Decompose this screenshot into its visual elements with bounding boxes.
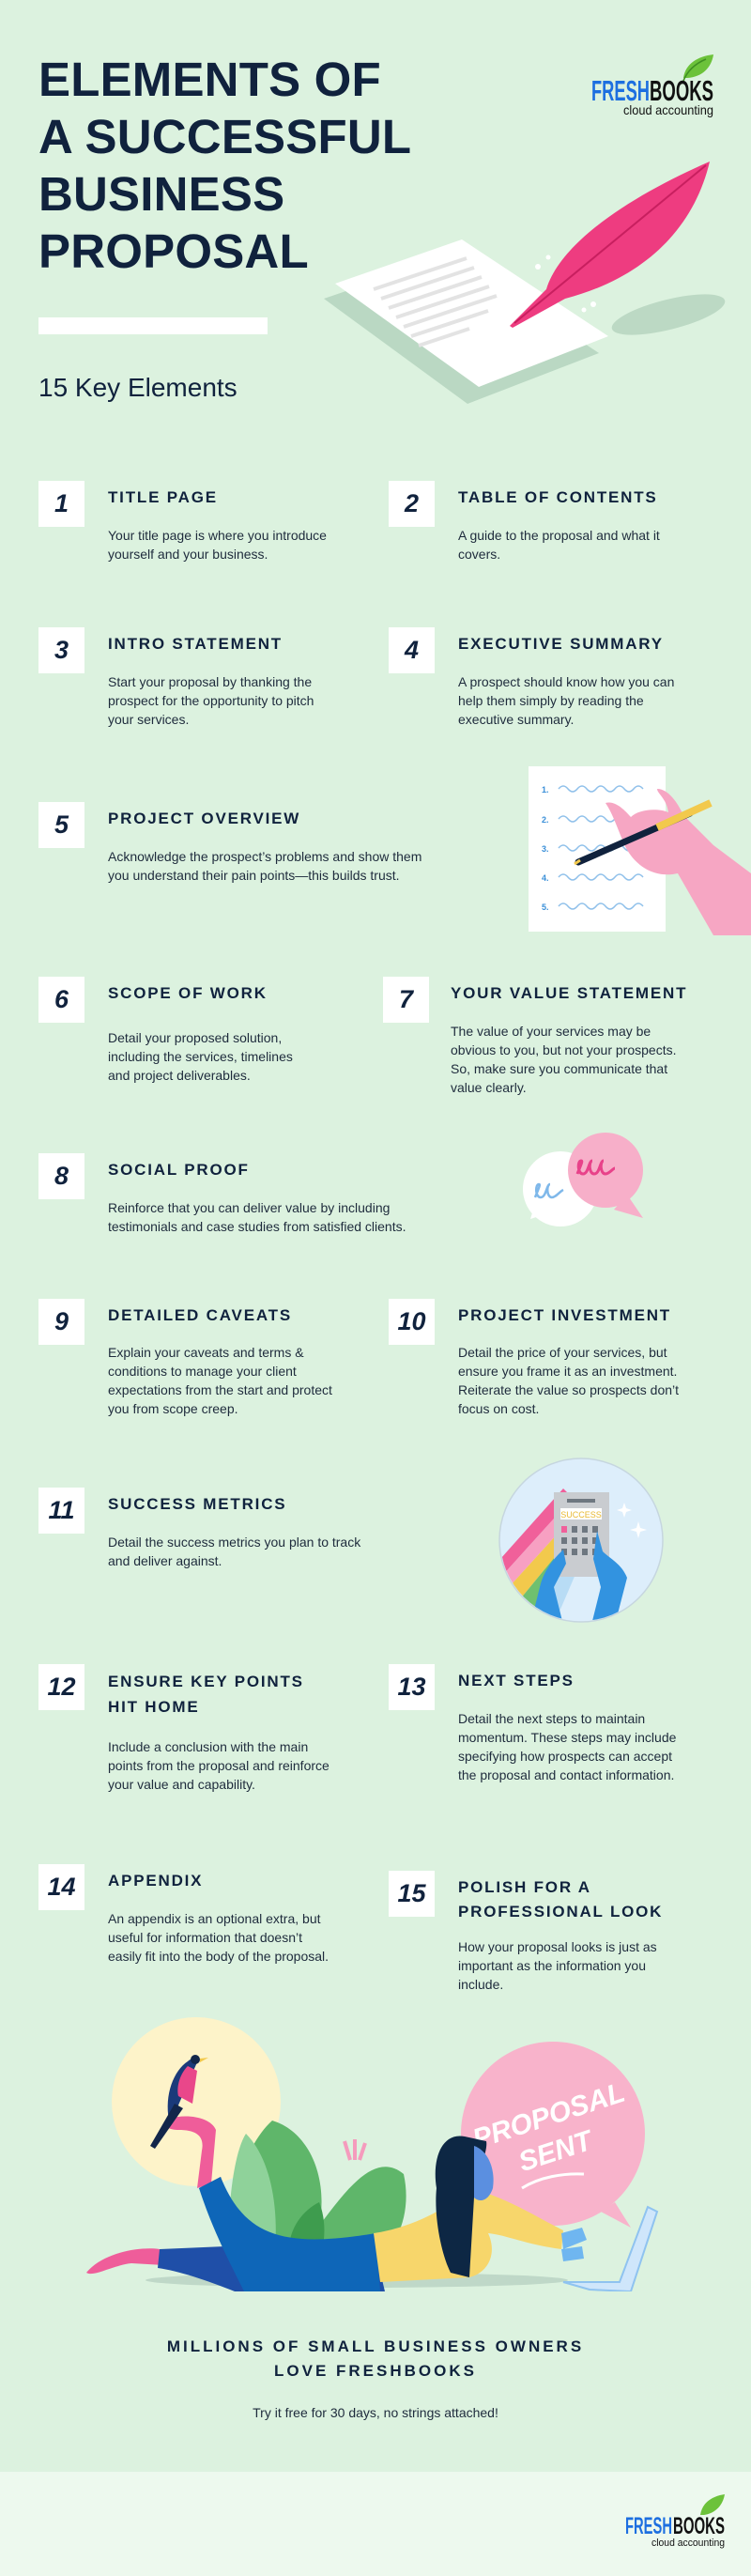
body 7: So, make sure you communicate that xyxy=(451,1061,667,1076)
body 9: Explain your caveats and terms & xyxy=(108,1345,304,1360)
body 3: Start your proposal by thanking the xyxy=(108,674,312,689)
title: A SUCCESSFUL xyxy=(38,110,411,163)
body 14: An appendix is an optional extra, but xyxy=(108,1911,321,1926)
number 4 xyxy=(389,627,435,673)
illustration: calculator circle: SUCCESS xyxy=(560,1510,602,1519)
body 4: executive summary. xyxy=(458,712,574,727)
item 15 xyxy=(389,1871,663,1992)
number 2: 2 xyxy=(405,489,419,517)
heading 9: DETAILED CAVEATS xyxy=(108,1306,292,1324)
number 4: 4 xyxy=(405,636,419,664)
body 10: Detail the price of your services, but xyxy=(458,1345,667,1360)
heading 5: PROJECT OVERVIEW xyxy=(108,810,300,827)
illustration: checklist with hand and pen: 2. xyxy=(542,815,549,825)
number 14 xyxy=(38,1864,84,1910)
logo: freshbooks footer: cloud accounting xyxy=(651,2537,725,2549)
number 11: 11 xyxy=(48,1496,75,1524)
heading 15: PROFESSIONAL LOOK xyxy=(458,1903,663,1920)
illustration: checklist with hand and pen: 1. xyxy=(542,785,549,794)
body 10: focus on cost. xyxy=(458,1401,539,1416)
body 6: and project deliverables. xyxy=(108,1068,251,1083)
number 11 xyxy=(38,1488,84,1534)
body 7: value clearly. xyxy=(451,1080,527,1095)
body 3: your services. xyxy=(108,712,189,727)
heading 14: APPENDIX xyxy=(108,1872,203,1890)
body 7 xyxy=(451,1024,676,1095)
body 10: ensure you frame it as an investment. xyxy=(458,1364,677,1379)
number 13 xyxy=(389,1664,435,1710)
item 4 xyxy=(389,627,674,727)
body 9 xyxy=(108,1345,332,1416)
body 12: your value and capability. xyxy=(108,1777,255,1792)
footer headline xyxy=(167,2337,584,2380)
item 10 xyxy=(389,1299,679,1416)
number 7 xyxy=(383,977,429,1023)
heading 15 xyxy=(458,1878,663,1920)
illustration: woman sending proposal: SENT xyxy=(514,2124,598,2178)
footer band xyxy=(0,2472,751,2576)
body 2: A guide to the proposal and what it xyxy=(458,528,660,543)
body 13: specifying how prospects can accept xyxy=(458,1749,672,1764)
body 1: yourself and your business. xyxy=(108,547,268,562)
illustration: paper and feather xyxy=(324,162,725,404)
item 5 xyxy=(38,802,421,883)
number 8 xyxy=(38,1153,84,1199)
number 14: 14 xyxy=(47,1873,76,1901)
illustration: checklist with hand and pen xyxy=(529,766,751,935)
body 15: include. xyxy=(458,1977,503,1992)
item 8 xyxy=(38,1153,406,1234)
number 15 xyxy=(389,1871,435,1917)
body 7: The value of your services may be xyxy=(451,1024,651,1039)
heading 6: SCOPE OF WORK xyxy=(108,984,268,1002)
heading 10: PROJECT INVESTMENT xyxy=(458,1306,671,1324)
white title bar xyxy=(38,317,268,334)
number 3 xyxy=(38,627,84,673)
logo: freshbooks header xyxy=(591,54,713,117)
body 5: you understand their pain points—this builds trust. xyxy=(108,868,400,883)
item 6 xyxy=(38,977,293,1083)
number 5 xyxy=(38,802,84,848)
item 7 xyxy=(383,977,687,1095)
body 15: important as the information you xyxy=(458,1958,646,1973)
heading 3: INTRO STATEMENT xyxy=(108,635,283,653)
illustration: calculator circle xyxy=(498,1458,664,1623)
number 7: 7 xyxy=(399,985,413,1013)
item 14 xyxy=(38,1864,329,1964)
body 10: Reiterate the value so prospects don’t xyxy=(458,1382,679,1397)
body 11: and deliver against. xyxy=(108,1553,222,1568)
body 5: Acknowledge the prospect’s problems and show them xyxy=(108,849,421,864)
body 2: covers. xyxy=(458,547,500,562)
illustration: woman sending proposal xyxy=(86,2017,659,2291)
logo: freshbooks footer xyxy=(625,2494,725,2549)
body 4 xyxy=(458,674,674,727)
body 13 xyxy=(458,1711,676,1782)
heading 11: SUCCESS METRICS xyxy=(108,1495,286,1513)
body 14: easily fit into the body of the proposal. xyxy=(108,1949,329,1964)
illustration: woman sending proposal: PROPOSAL xyxy=(468,2077,629,2155)
heading 8: SOCIAL PROOF xyxy=(108,1161,250,1179)
number 15: 15 xyxy=(397,1879,426,1907)
body 3 xyxy=(108,674,314,727)
number 12 xyxy=(38,1664,84,1710)
body 5 xyxy=(108,849,421,883)
body 1: Your title page is where you introduce xyxy=(108,528,327,543)
illustration: checklist with hand and pen: 3. xyxy=(542,844,549,854)
title: BUSINESS xyxy=(38,167,284,221)
body 15 xyxy=(458,1939,657,1992)
number 1: 1 xyxy=(54,489,69,517)
body 4: A prospect should know how you can xyxy=(458,674,674,689)
title: PROPOSAL xyxy=(38,224,309,278)
number 13: 13 xyxy=(397,1673,426,1701)
number 1 xyxy=(38,481,84,527)
illustration: speech bubbles xyxy=(523,1133,643,1226)
subtitle: 15 Key Elements xyxy=(38,373,238,402)
body 13: the proposal and contact information. xyxy=(458,1767,674,1782)
number 6: 6 xyxy=(54,985,69,1013)
title: ELEMENTS OF xyxy=(38,53,381,106)
number 3: 3 xyxy=(54,636,69,664)
body 15: How your proposal looks is just as xyxy=(458,1939,657,1954)
heading 7: YOUR VALUE STATEMENT xyxy=(451,984,687,1002)
body 2 xyxy=(458,528,660,562)
title xyxy=(38,53,411,278)
item 12 xyxy=(38,1664,330,1792)
body 4: help them simply by reading the xyxy=(458,693,644,708)
body 14: useful for information that doesn’t xyxy=(108,1930,302,1945)
item 3 xyxy=(38,627,314,727)
number 10: 10 xyxy=(397,1307,426,1335)
heading 2: TABLE OF CONTENTS xyxy=(458,488,658,506)
number 5: 5 xyxy=(54,810,69,839)
heading 12: HIT HOME xyxy=(108,1698,200,1716)
footer call to action: Try it free for 30 days, no strings attached! xyxy=(253,2405,498,2420)
body 1 xyxy=(108,528,327,562)
heading 1: TITLE PAGE xyxy=(108,488,218,506)
number 9 xyxy=(38,1299,84,1345)
body 9: expectations from the start and protect xyxy=(108,1382,332,1397)
heading 12 xyxy=(108,1673,304,1716)
number 2 xyxy=(389,481,435,527)
item 1 xyxy=(38,481,327,562)
body 8: testimonials and case studies from satisfied clients. xyxy=(108,1219,406,1234)
footer headline: LOVE FRESHBOOKS xyxy=(274,2362,477,2380)
body 6: including the services, timelines xyxy=(108,1049,293,1064)
logo: freshbooks footer: FRESH xyxy=(625,2513,672,2539)
number 12: 12 xyxy=(47,1673,76,1701)
body 6 xyxy=(108,1030,293,1083)
heading 4: EXECUTIVE SUMMARY xyxy=(458,635,664,653)
illustration: checklist with hand and pen: 4. xyxy=(542,873,549,883)
heading 15: POLISH FOR A xyxy=(458,1878,591,1896)
body 9: conditions to manage your client xyxy=(108,1364,297,1379)
body 9: you from scope creep. xyxy=(108,1401,238,1416)
item 9 xyxy=(38,1299,332,1416)
heading 12: ENSURE KEY POINTS xyxy=(108,1673,304,1690)
heading 13: NEXT STEPS xyxy=(458,1672,575,1689)
number 10 xyxy=(389,1299,435,1345)
body 10 xyxy=(458,1345,679,1416)
body 3: prospect for the opportunity to pitch xyxy=(108,693,314,708)
number 9: 9 xyxy=(54,1307,69,1335)
body 6: Detail your proposed solution, xyxy=(108,1030,282,1045)
footer headline: MILLIONS OF SMALL BUSINESS OWNERS xyxy=(167,2337,584,2355)
body 13: momentum. These steps may include xyxy=(458,1730,676,1745)
body 7: obvious to you, but not your prospects. xyxy=(451,1042,676,1057)
body 12: Include a conclusion with the main xyxy=(108,1739,308,1754)
item 2 xyxy=(389,481,660,562)
item 11 xyxy=(38,1488,360,1568)
body 8 xyxy=(108,1200,406,1234)
body 11: Detail the success metrics you plan to track xyxy=(108,1535,360,1550)
body 8: Reinforce that you can deliver value by including xyxy=(108,1200,390,1215)
item 13 xyxy=(389,1664,676,1782)
body 12 xyxy=(108,1739,330,1792)
body 12: points from the proposal and reinforce xyxy=(108,1758,330,1773)
illustration: checklist with hand and pen: 5. xyxy=(542,902,549,912)
body 11 xyxy=(108,1535,360,1568)
body 13: Detail the next steps to maintain xyxy=(458,1711,645,1726)
number 6 xyxy=(38,977,84,1023)
body 14 xyxy=(108,1911,329,1964)
number 8: 8 xyxy=(54,1162,69,1190)
logo: freshbooks header: FRESH xyxy=(591,74,650,107)
